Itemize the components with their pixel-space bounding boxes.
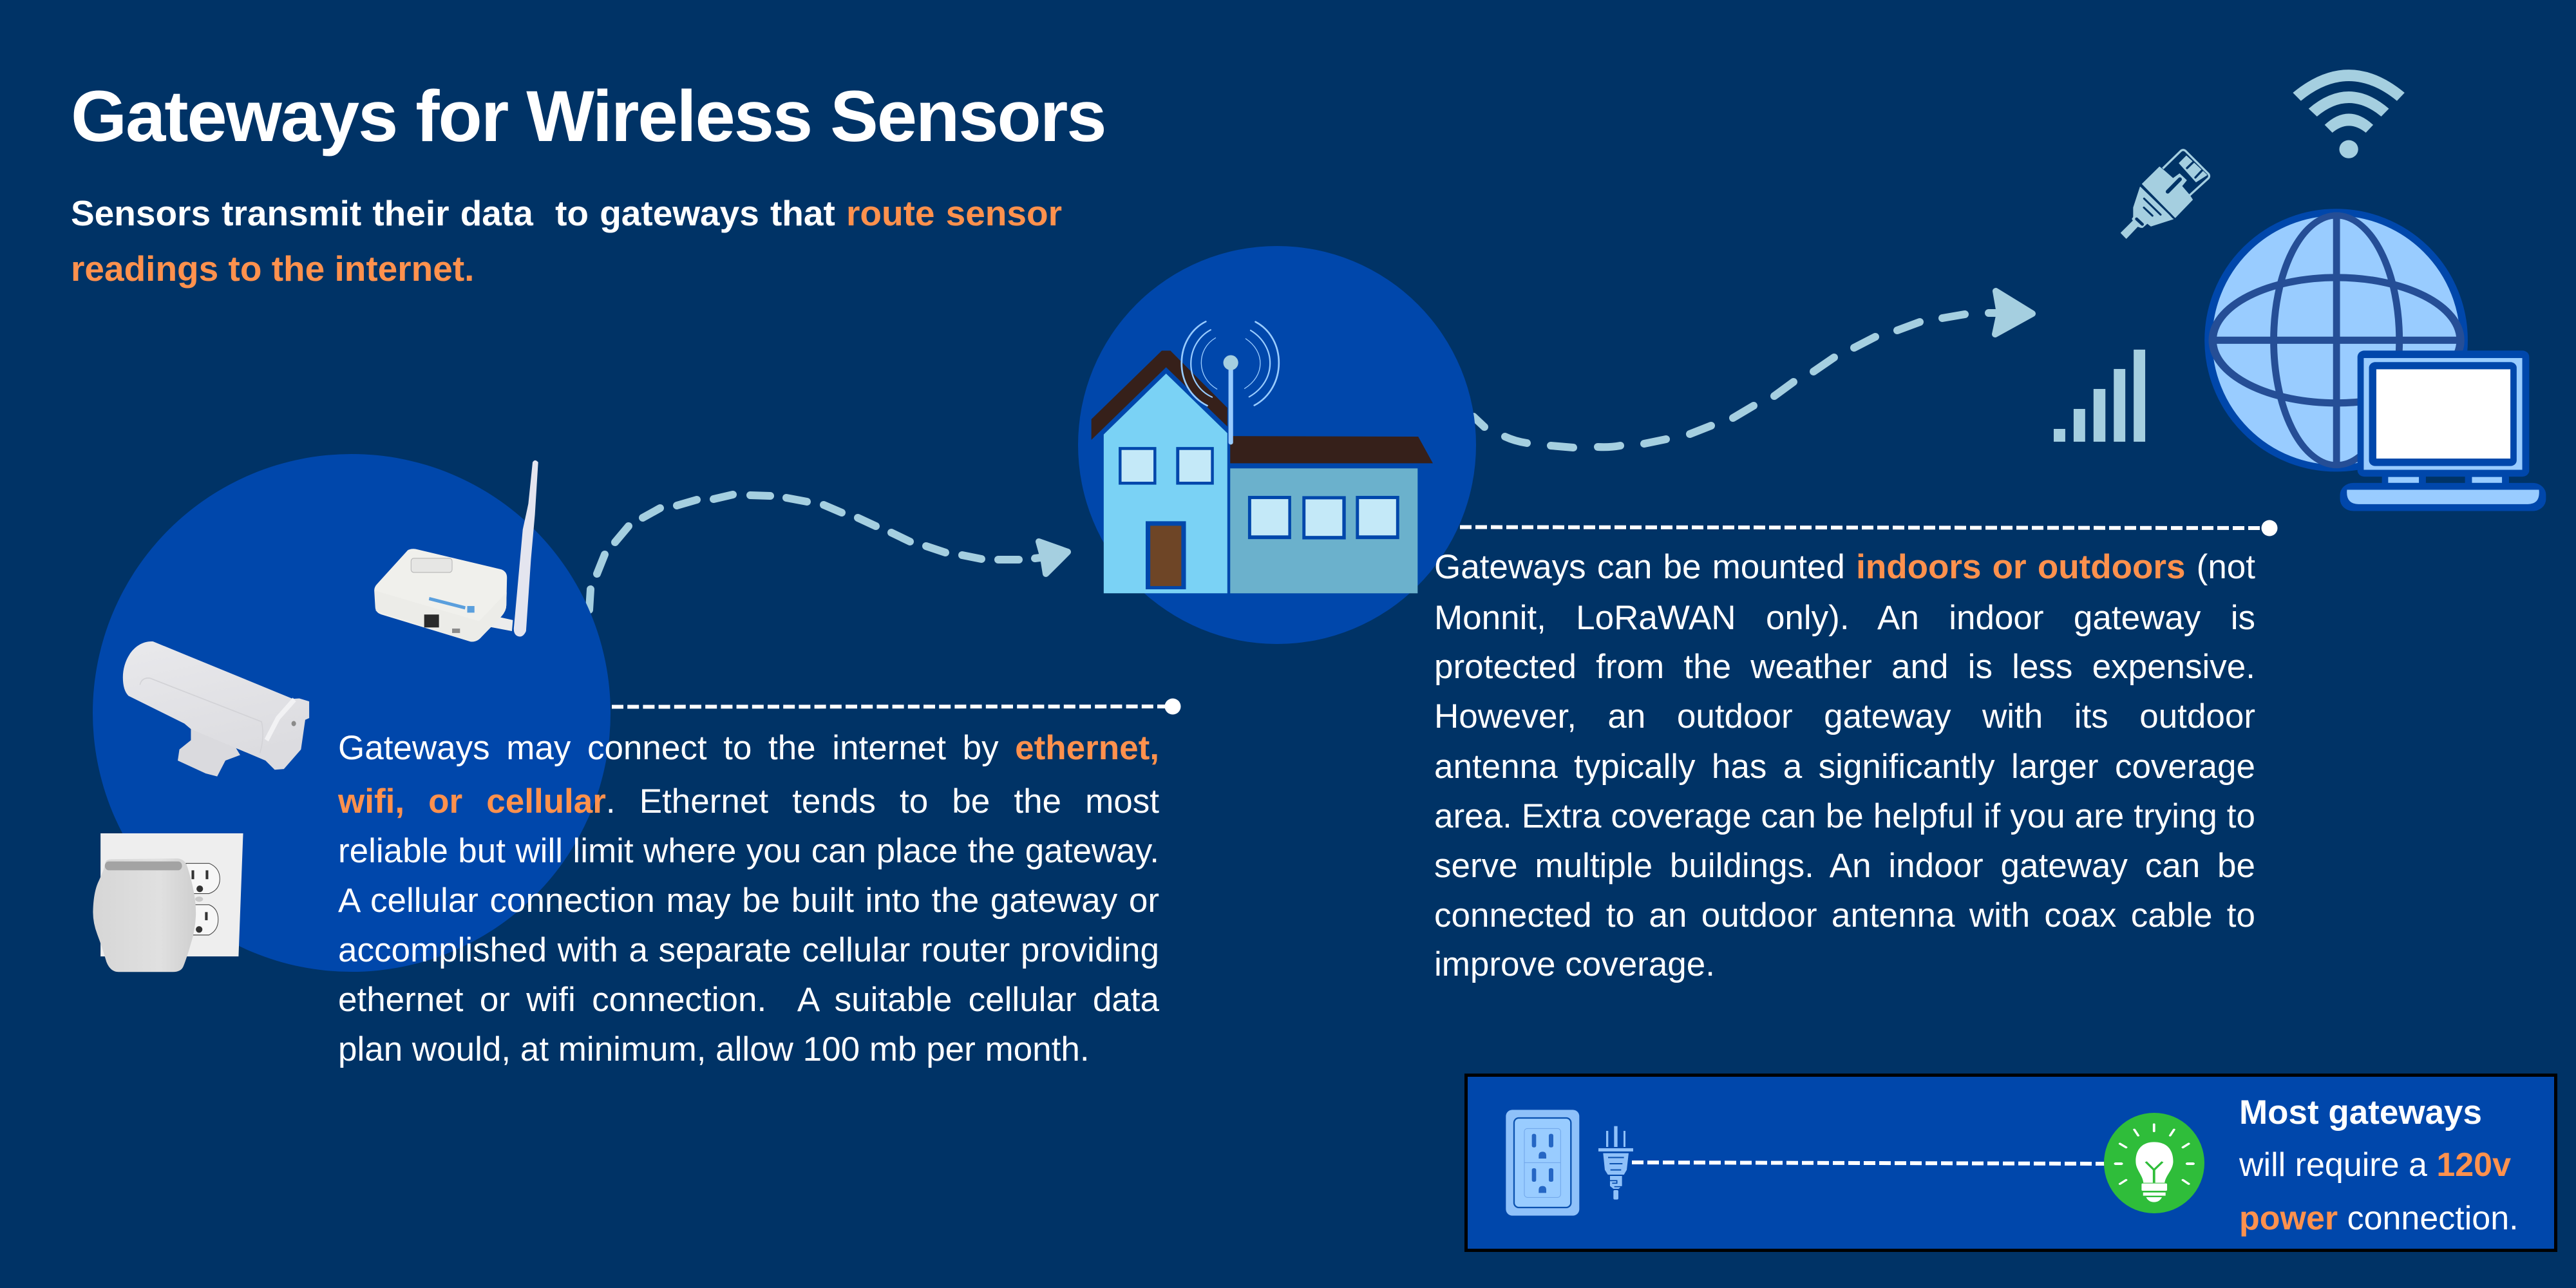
icon: laptop xyxy=(2340,350,2546,511)
garage body xyxy=(1230,468,1417,593)
garage roof xyxy=(1230,436,1433,463)
arrow: dashed curve from gateways to house xyxy=(589,495,1068,610)
text block: internet connection types: ethernet or wifi connection. A suitable cellular data xyxy=(338,981,1159,1019)
text block: indoor vs outdoor gateways: protected from the weather and is less expensive. xyxy=(1434,648,2255,686)
panel circle: gateway devices xyxy=(93,454,611,972)
icon: light bulb xyxy=(2104,1113,2204,1213)
text block: power requirement: will require a 120v xyxy=(2239,1146,2511,1184)
text block: internet connection types: Gateways may connect to the internet by ethernet, xyxy=(338,729,1159,767)
icon: wall outlet xyxy=(1506,1110,1579,1216)
text block: indoor vs outdoor gateways: area. Extra coverage can be helpful if you are trying to xyxy=(1434,797,2255,835)
text block: power requirement: Most gateways xyxy=(2239,1094,2482,1132)
text block: internet connection types: accomplished with a separate cellular router providing xyxy=(338,931,1159,969)
photo: outdoor cylinder gateway xyxy=(123,641,309,777)
text block: internet connection types: wifi, or cellular. Ethernet tends to be the most xyxy=(338,782,1159,820)
text block: indoor vs outdoor gateways: serve multiple buildings. An indoor gateway can be xyxy=(1434,847,2255,885)
arrow: dashed curve from house to internet xyxy=(1473,291,2032,448)
main house body xyxy=(1104,374,1227,593)
text block: indoor vs outdoor gateways xyxy=(1434,548,2255,983)
text block: indoor vs outdoor gateways: improve coverage. xyxy=(1434,945,1715,983)
photo: indoor router with antenna xyxy=(374,460,538,641)
icon: wifi xyxy=(2293,70,2405,158)
subtitle: readings to the internet. xyxy=(71,249,474,289)
text block: internet connection types xyxy=(337,729,1159,1068)
text block: indoor vs outdoor gateways: Monnit, LoRaWAN only). An indoor gateway is xyxy=(1434,599,2255,637)
text block: indoor vs outdoor gateways: antenna typically has a significantly larger coverage xyxy=(1434,748,2255,786)
text block: internet connection types: plan would, at minimum, allow 100 mb per month. xyxy=(338,1030,1090,1068)
main roof xyxy=(1092,351,1227,440)
dashed connector: left text xyxy=(612,698,1181,715)
text block: indoor vs outdoor gateways: However, an outdoor gateway with its outdoor xyxy=(1434,697,2255,735)
panel: power requirement box xyxy=(1466,1075,2555,1251)
text block: indoor vs outdoor gateways: connected to an outdoor antenna with coax cable to xyxy=(1434,896,2255,934)
antenna mast xyxy=(1226,369,1236,442)
title: Gateways for Wireless Sensors xyxy=(71,76,1105,156)
text block: internet connection types: A cellular connection may be built into the gateway or xyxy=(338,882,1159,920)
dashed connector: right text xyxy=(1460,520,2277,536)
text block: internet connection types: reliable but will limit where you can place the gateway. xyxy=(338,832,1159,870)
text block: power requirement xyxy=(2239,1094,2519,1237)
icon: ethernet plug xyxy=(2121,150,2209,238)
text block: power requirement: power connection. xyxy=(2239,1200,2519,1237)
text block: indoor vs outdoor gateways: Gateways can be mounted indoors or outdoors (not xyxy=(1434,548,2255,586)
photo: plug-in gateway on wall outlet xyxy=(93,833,243,972)
dashed power line xyxy=(1632,1162,2105,1164)
icon: signal bars xyxy=(2054,350,2145,442)
panel circle: house xyxy=(1078,246,1476,644)
subtitle: Sensors transmit their data to gateways that route sensor xyxy=(71,193,1062,233)
icon: globe xyxy=(2208,213,2464,468)
icon: house with antenna xyxy=(1092,321,1433,593)
subtitle xyxy=(71,193,1062,289)
radio waves xyxy=(1182,321,1279,406)
icon: power plug xyxy=(1598,1126,1633,1200)
